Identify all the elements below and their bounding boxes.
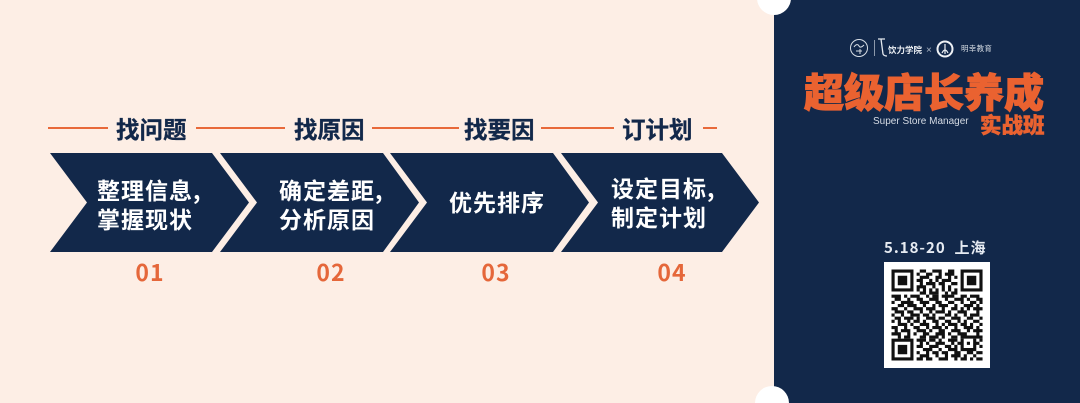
qr code [884,262,990,368]
ticket notch bottom [755,386,789,403]
number 02: 02 [316,254,346,288]
step 4 text: 制定计划 [611,199,707,233]
heading: 订计划: 订计划 [622,111,692,145]
date and location: 5.18-20 上海 [884,237,986,258]
logo row [850,39,992,56]
heading: 找要因: 找要因 [464,111,534,145]
step 2 text: 分析原因 [279,201,375,235]
step labels row [48,111,717,145]
chevron step 4 [561,153,759,252]
panel: course sidebar [755,0,1080,403]
icon: brand mark [878,39,887,56]
title: 超级店长养成 [804,61,1044,119]
brand name: 饮力学院 [888,44,923,56]
cross: × [926,45,932,56]
partner name: 明幸教育 [961,43,992,54]
panel: process flow [48,111,759,288]
heading: 找问题: 找问题 [116,111,186,145]
icon: circular partner logo [938,42,952,56]
number 01: 01 [135,254,165,288]
chevron step 1 [50,153,249,252]
step 3 text: 优先排序 [449,184,545,218]
number 03: 03 [481,254,511,288]
chevron step 3 [390,153,589,252]
subtitle english: Super Store Manager [873,116,969,127]
icon: round logo left [850,40,868,56]
subtitle 实战班: 实战班 [980,109,1045,140]
step 1 text: 掌握现状 [97,201,193,235]
ticket notch top [757,0,791,15]
step 1 text: 整理信息, [97,172,201,206]
chevron step 2 [220,153,419,252]
step 4 text: 设定目标, [611,170,715,204]
number 04: 04 [657,254,687,288]
step 2 text: 确定差距, [279,172,383,206]
heading: 找原因: 找原因 [294,111,364,145]
